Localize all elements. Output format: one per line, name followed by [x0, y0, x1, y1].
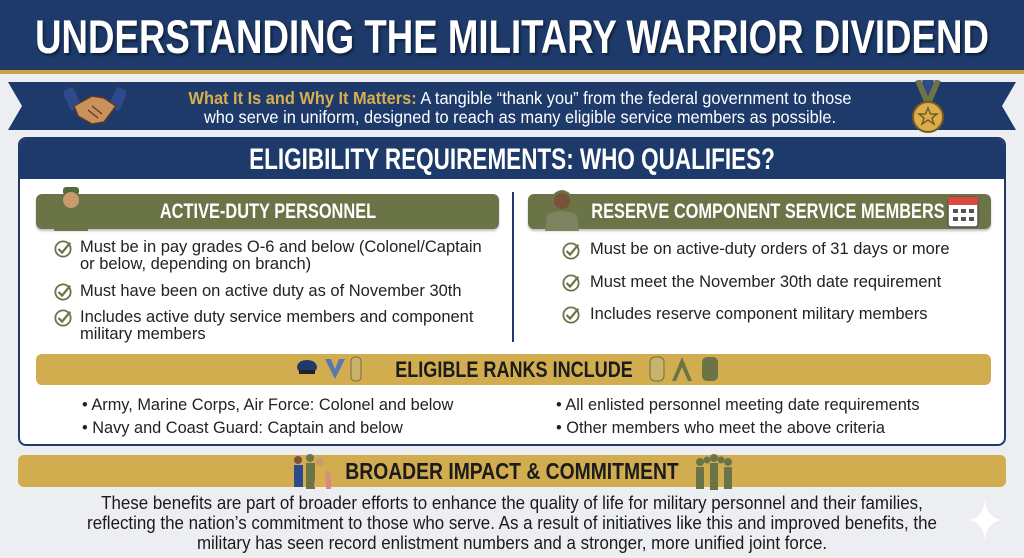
gold bar: eligible ranks: ELIGIBLE RANKS INCLUDE: [395, 357, 632, 382]
panel heading: [20, 139, 1004, 179]
olive bar: active duty: ACTIVE-DUTY PERSONNEL: [159, 200, 376, 223]
icons: rank insignia right: [650, 356, 718, 382]
icon: soldier active: [54, 187, 88, 231]
icon: handshake: [64, 87, 126, 125]
icon: medal: [912, 80, 944, 133]
list: active duty: military members: [80, 325, 206, 343]
olive bar: reserve: RESERVE COMPONENT SERVICE MEMBERS: [591, 200, 944, 223]
icon: soldier reserve: [545, 190, 579, 231]
gold bar: eligible ranks: [36, 354, 991, 385]
panel: eligibility: [18, 137, 1006, 446]
intro text: What It Is and Why It Matters: A tangible “thank you” from the federal government to those: [189, 88, 851, 108]
olive bar: active duty: [36, 194, 499, 229]
paragraph: These benefits are part of broader efforts to enhance the quality of life for military personnel and their families,: [101, 493, 923, 513]
gold bar: broader impact: BROADER IMPACT & COMMITMENT: [345, 458, 679, 484]
list: active duty: [54, 238, 482, 343]
list: ranks left: [82, 396, 454, 437]
list: ranks left: • Navy and Coast Guard: Captain and below: [82, 419, 403, 437]
list: ranks right: [556, 396, 920, 437]
list: reserve: Must be on active-duty orders of 31 days or more: [590, 240, 950, 258]
divider: [512, 192, 514, 342]
title: UNDERSTANDING THE MILITARY WARRIOR DIVIDEND: [35, 10, 989, 63]
paragraph: military has seen record enlistment numbers and a stronger, more unified joint force.: [197, 533, 827, 553]
list: ranks left: • Army, Marine Corps, Air Force: Colonel and below: [82, 396, 453, 414]
icons: rank insignia left: [297, 356, 362, 382]
paragraph: [87, 493, 937, 553]
gold bar: broader impact: [18, 455, 1006, 487]
list: active duty: Includes active duty service members and component: [80, 308, 473, 326]
paragraph: reflecting the nation’s commitment to those who serve. As a result of initiatives like this and improved benefits, the: [87, 513, 937, 533]
intro text: who serve in uniform, designed to reach as many eligible service members as possible.: [204, 107, 836, 127]
icon: sparkle: [969, 502, 1001, 538]
intro text: [188, 88, 851, 127]
list: reserve: [562, 240, 950, 324]
list: reserve: Must meet the November 30th date requirement: [590, 273, 941, 291]
list: active duty: or below, depending on branch): [80, 255, 311, 273]
list: reserve: Includes reserve component military members: [590, 305, 927, 323]
panel heading: ELIGIBILITY REQUIREMENTS: WHO QUALIFIES?: [249, 143, 775, 176]
list: ranks right: • All enlisted personnel meeting date requirements: [556, 396, 920, 414]
list: ranks right: • Other members who meet the above criteria: [556, 419, 885, 437]
header bar: [0, 0, 1024, 70]
olive bar: reserve: [528, 194, 991, 229]
icon: family: [294, 454, 331, 489]
list: active duty: Must be in pay grades O-6 and below (Colonel/Captain: [80, 238, 482, 256]
list: active duty: Must have been on active duty as of November 30th: [80, 282, 462, 300]
icon: troops: [696, 454, 732, 490]
ribbon banner: [8, 82, 1016, 130]
icon: calendar: [947, 196, 979, 228]
